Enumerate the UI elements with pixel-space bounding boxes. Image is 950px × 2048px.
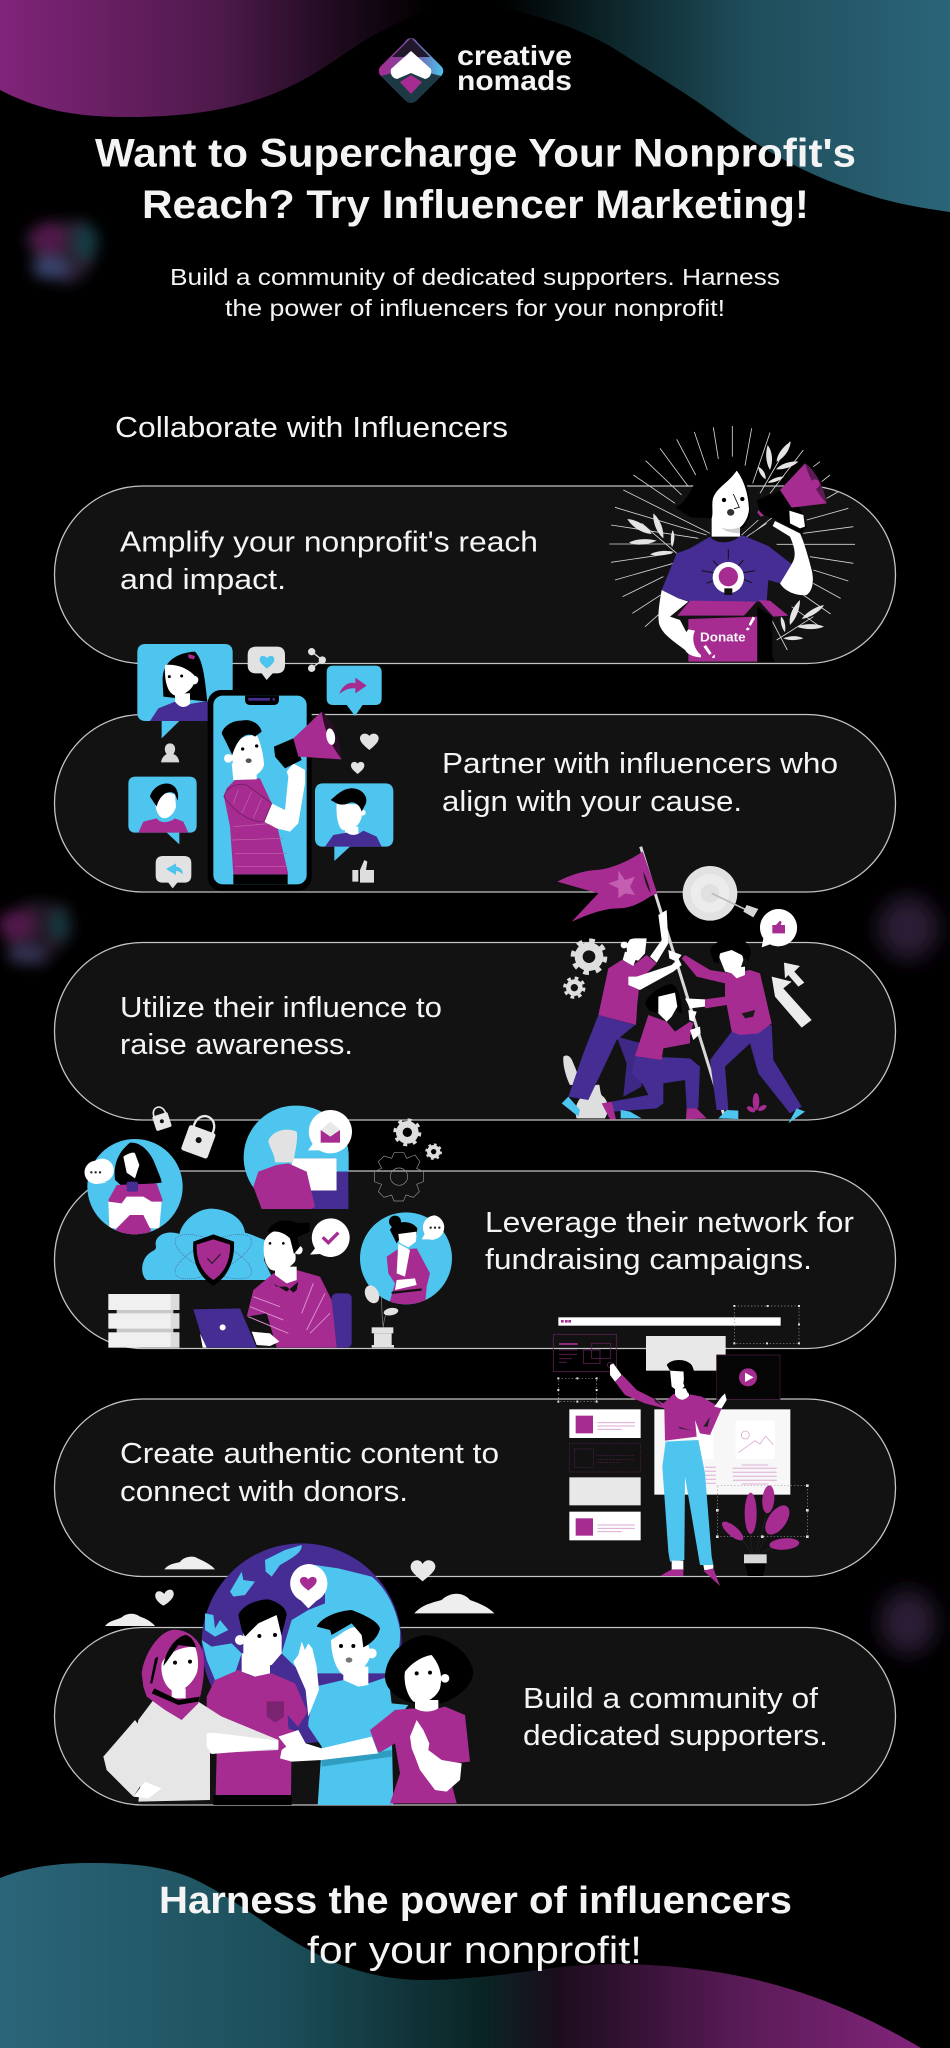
background: bottom wave bbox=[0, 1863, 921, 2048]
shield bbox=[193, 1234, 234, 1286]
woman curly hair bbox=[370, 1635, 473, 1803]
illustration: community around globe bbox=[103, 1543, 494, 1805]
decorative blur: middle right bbox=[878, 896, 938, 960]
logo wordmark: creative bbox=[457, 40, 572, 71]
panel: pill 4 bbox=[54, 1171, 896, 1348]
text: pill 2: align with your cause. bbox=[442, 786, 742, 818]
box flaps bbox=[677, 600, 788, 617]
person kneeling bbox=[602, 984, 707, 1119]
waving hand bbox=[293, 1642, 319, 1717]
flag pole bbox=[641, 847, 725, 1118]
phone bbox=[208, 690, 312, 891]
bubble: check bbox=[310, 1218, 350, 1257]
bush bbox=[563, 1055, 608, 1118]
text: pill 6: dedicated supporters. bbox=[523, 1720, 828, 1752]
plant bbox=[719, 1485, 800, 1576]
card 1 bbox=[569, 1409, 641, 1438]
text: pill 3: Utilize their influence to bbox=[120, 992, 442, 1024]
clouds bbox=[105, 1557, 494, 1626]
bubble: mail bbox=[308, 1110, 352, 1153]
person right bbox=[668, 939, 805, 1123]
circle: woman thinking bbox=[360, 1212, 452, 1307]
text: pill 3: raise awareness. bbox=[120, 1029, 353, 1061]
plant bbox=[362, 1283, 399, 1348]
bubble: arrow bbox=[327, 666, 382, 716]
shirt bbox=[662, 535, 792, 602]
text: pill 5 bbox=[120, 1438, 499, 1508]
dotted frame plant bbox=[716, 1484, 809, 1538]
speech dots right bbox=[422, 1215, 444, 1240]
text: pill 2 bbox=[442, 748, 838, 818]
logo wordmark bbox=[457, 40, 572, 96]
icon: heart large bbox=[360, 734, 379, 750]
outlined content card bbox=[553, 1334, 616, 1372]
phone screen bbox=[213, 696, 307, 884]
text: pill 1: Amplify your nonprofit's reach bbox=[120, 526, 538, 558]
gears bbox=[374, 1120, 441, 1201]
small plant bbox=[746, 1093, 768, 1114]
gear large bbox=[573, 941, 605, 973]
card 3 gray bbox=[569, 1477, 641, 1505]
clasped hands and arm bbox=[278, 1730, 392, 1767]
man on phone bbox=[222, 712, 342, 884]
dotted frame top right bbox=[733, 1305, 800, 1344]
globe bbox=[202, 1543, 402, 1743]
closing line: for your nonprofit! bbox=[307, 1930, 642, 1972]
bubble: reply bbox=[156, 856, 191, 888]
text: pill 1: and impact. bbox=[120, 564, 286, 596]
illustration: phone and social bubbles bbox=[128, 644, 393, 891]
dotted frame left bbox=[557, 1377, 598, 1403]
circle: man at computer bbox=[244, 1106, 349, 1209]
icon: heart small bbox=[351, 762, 364, 774]
text: pill 3 bbox=[120, 992, 442, 1061]
text: pill 6 bbox=[523, 1683, 828, 1752]
bubble: man left bbox=[128, 777, 197, 844]
panel: pill 5 bbox=[54, 1399, 896, 1576]
raised hand and forearm bbox=[410, 1720, 462, 1792]
background: top purple wave bbox=[0, 0, 440, 117]
man with laptop bbox=[193, 1220, 352, 1348]
panel: pill 2 bbox=[54, 714, 896, 892]
flag bbox=[557, 852, 657, 922]
logo bbox=[379, 38, 572, 103]
woman hijab bbox=[103, 1630, 278, 1802]
like bubble bbox=[760, 909, 797, 947]
decorative blur: upper left bbox=[24, 220, 100, 286]
phone notch bbox=[245, 696, 279, 705]
target bbox=[683, 866, 758, 921]
logo wordmark: nomads bbox=[457, 65, 572, 96]
megaphone bbox=[757, 463, 827, 533]
decorative blur: lower right bbox=[880, 1590, 936, 1654]
orbits bbox=[169, 1225, 257, 1288]
title: Reach? Try Influencer Marketing! bbox=[142, 183, 809, 227]
subtitle: the power of influencers for your nonprofit! bbox=[225, 295, 725, 321]
circle: woman with phone bbox=[87, 1139, 183, 1237]
server stack bbox=[108, 1294, 179, 1348]
icon: logo diamond bbox=[379, 38, 443, 103]
man blue shirt bbox=[308, 1610, 408, 1805]
icon: share bbox=[309, 649, 325, 671]
bubble: heart bbox=[248, 647, 285, 680]
box label: Donate bbox=[700, 631, 746, 645]
speech dots bbox=[84, 1159, 114, 1184]
title bbox=[95, 132, 856, 227]
right arm bbox=[773, 521, 813, 595]
large content panel bbox=[654, 1409, 790, 1495]
exclamation marks bbox=[703, 617, 755, 658]
icon: thumbs up bbox=[352, 860, 374, 883]
bubble: man right bbox=[315, 783, 393, 861]
card 4 bbox=[569, 1512, 641, 1540]
left arm bbox=[658, 590, 700, 658]
text: pill 6: Build a community of bbox=[523, 1683, 819, 1715]
person left bbox=[562, 910, 682, 1117]
icon: person bbox=[161, 743, 179, 762]
hearts bbox=[155, 1560, 435, 1606]
panel: pill 1 bbox=[54, 486, 896, 664]
section heading: Collaborate with Influencers bbox=[115, 412, 508, 444]
woman bbox=[610, 1360, 727, 1586]
arrow big bbox=[772, 977, 812, 1028]
leaves bbox=[627, 442, 824, 640]
illustration: megaphone woman with donate box bbox=[609, 426, 855, 662]
card 2 dotted bbox=[569, 1443, 641, 1472]
text: pill 4: Leverage their network for bbox=[485, 1207, 854, 1239]
bulb graphic bbox=[702, 549, 755, 595]
hair bbox=[675, 465, 750, 528]
gray panel bbox=[646, 1336, 726, 1371]
background: top teal wave bbox=[470, 0, 950, 212]
browser bar bbox=[558, 1317, 781, 1326]
text: pill 2: Partner with influencers who bbox=[442, 748, 838, 780]
illustration: people, cloud security and laptop bbox=[84, 1105, 452, 1348]
pin heart bbox=[290, 1564, 327, 1608]
illustration: woman presenting content bbox=[553, 1305, 809, 1586]
title: Want to Supercharge Your Nonprofit's bbox=[95, 132, 856, 176]
lock large bbox=[181, 1112, 221, 1159]
text: pill 5: connect with donors. bbox=[120, 1476, 408, 1508]
man magenta shirt bbox=[207, 1599, 307, 1805]
sunburst rays bbox=[609, 426, 855, 650]
cloud bbox=[142, 1209, 273, 1280]
face and neck bbox=[712, 471, 749, 537]
text: pill 4 bbox=[485, 1207, 854, 1276]
panel: pill 3 bbox=[54, 942, 896, 1120]
video frame bbox=[717, 1355, 780, 1399]
illustration: team raising flag bbox=[557, 847, 812, 1123]
text: pill 1 bbox=[120, 526, 538, 596]
text: pill 4: fundraising campaigns. bbox=[485, 1244, 812, 1276]
arrow small bbox=[784, 963, 804, 987]
panel: pill 6 bbox=[54, 1628, 896, 1805]
decorative blur: middle left bbox=[0, 900, 72, 968]
text: pill 5: Create authentic content to bbox=[120, 1438, 499, 1470]
subtitle bbox=[170, 264, 780, 321]
box body bbox=[688, 617, 757, 662]
gear small bbox=[565, 978, 584, 997]
closing line bbox=[159, 1880, 792, 1972]
hand on box bbox=[684, 629, 701, 657]
bubble: woman bbox=[137, 644, 233, 738]
closing line: Harness the power of influencers bbox=[159, 1880, 792, 1922]
subtitle: Build a community of dedicated supporters. Harness bbox=[170, 264, 780, 290]
box shadow side bbox=[757, 607, 775, 662]
lock small bbox=[150, 1105, 172, 1131]
